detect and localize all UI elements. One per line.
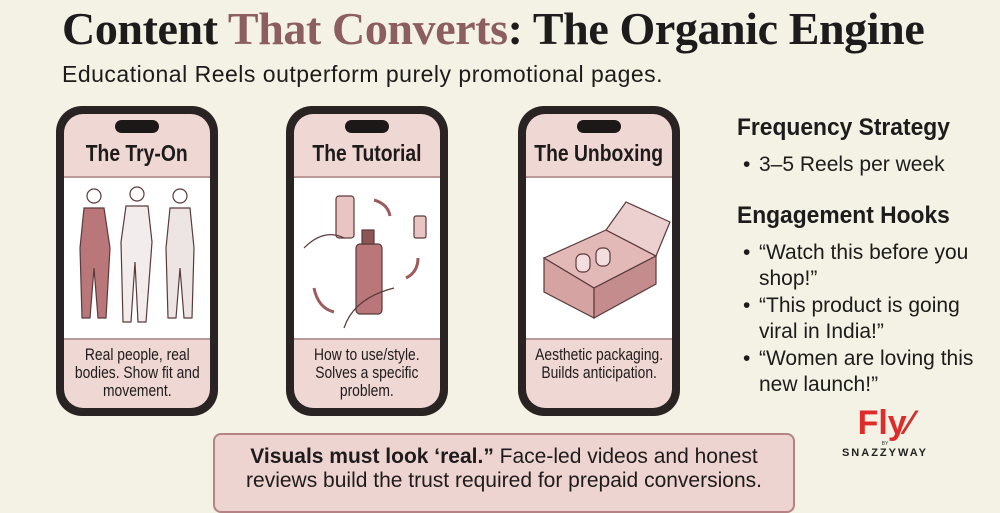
panel: tutorial phone: How to use/style. bbox=[314, 346, 420, 364]
subtitle: Educational Reels outperform purely promotional pages. bbox=[62, 61, 663, 87]
panel: try-on phone: Real people, real bbox=[85, 346, 189, 364]
panel: try-on phone: movement. bbox=[103, 382, 171, 400]
illustration: three figures bbox=[64, 176, 210, 340]
panel: tutorial phone bbox=[286, 106, 448, 416]
panel: unboxing phone: The Unboxing bbox=[535, 140, 663, 166]
right column: strategy: viral in India!” bbox=[759, 320, 884, 343]
panel: tutorial phone: problem. bbox=[340, 382, 394, 400]
panel: unboxing phone bbox=[518, 106, 680, 416]
illustration: open box bbox=[526, 176, 672, 340]
right column: strategy: shop!” bbox=[759, 267, 817, 290]
callout: Visuals must look ‘real.” Face-led videos and honest bbox=[250, 445, 758, 468]
logo bbox=[842, 404, 928, 459]
callout: reviews build the trust required for prepaid conversions. bbox=[246, 469, 762, 492]
right column: strategy: new launch!” bbox=[759, 373, 878, 396]
right column: strategy: “This product is going bbox=[759, 294, 960, 317]
callout bbox=[213, 433, 795, 513]
title: Content That Converts: The Organic Engine bbox=[62, 3, 924, 54]
panel: tutorial phone: Solves a specific bbox=[315, 364, 419, 382]
panel: unboxing phone: Builds anticipation. bbox=[541, 364, 657, 382]
heading: frequency: Frequency Strategy bbox=[737, 114, 950, 141]
logo: Fly⁄ bbox=[858, 404, 912, 442]
heading: engagement hooks: Engagement Hooks bbox=[737, 202, 950, 229]
right column: strategy bbox=[737, 114, 973, 396]
logo: SNAZZYWAY bbox=[842, 447, 928, 459]
right column: strategy: “Women are loving this bbox=[759, 347, 973, 370]
panel: tutorial phone: The Tutorial bbox=[312, 140, 422, 166]
panel: try-on phone: bodies. Show fit and bbox=[75, 364, 199, 382]
panel: try-on phone bbox=[56, 106, 218, 416]
right column: strategy: 3–5 Reels per week bbox=[759, 153, 945, 176]
illustration: hands with bottles bbox=[294, 176, 440, 340]
logo: BY bbox=[882, 441, 888, 447]
panel: unboxing phone: Aesthetic packaging. bbox=[535, 346, 663, 364]
panel: try-on phone: The Try-On bbox=[86, 140, 188, 166]
right column: strategy: “Watch this before you bbox=[759, 241, 968, 264]
